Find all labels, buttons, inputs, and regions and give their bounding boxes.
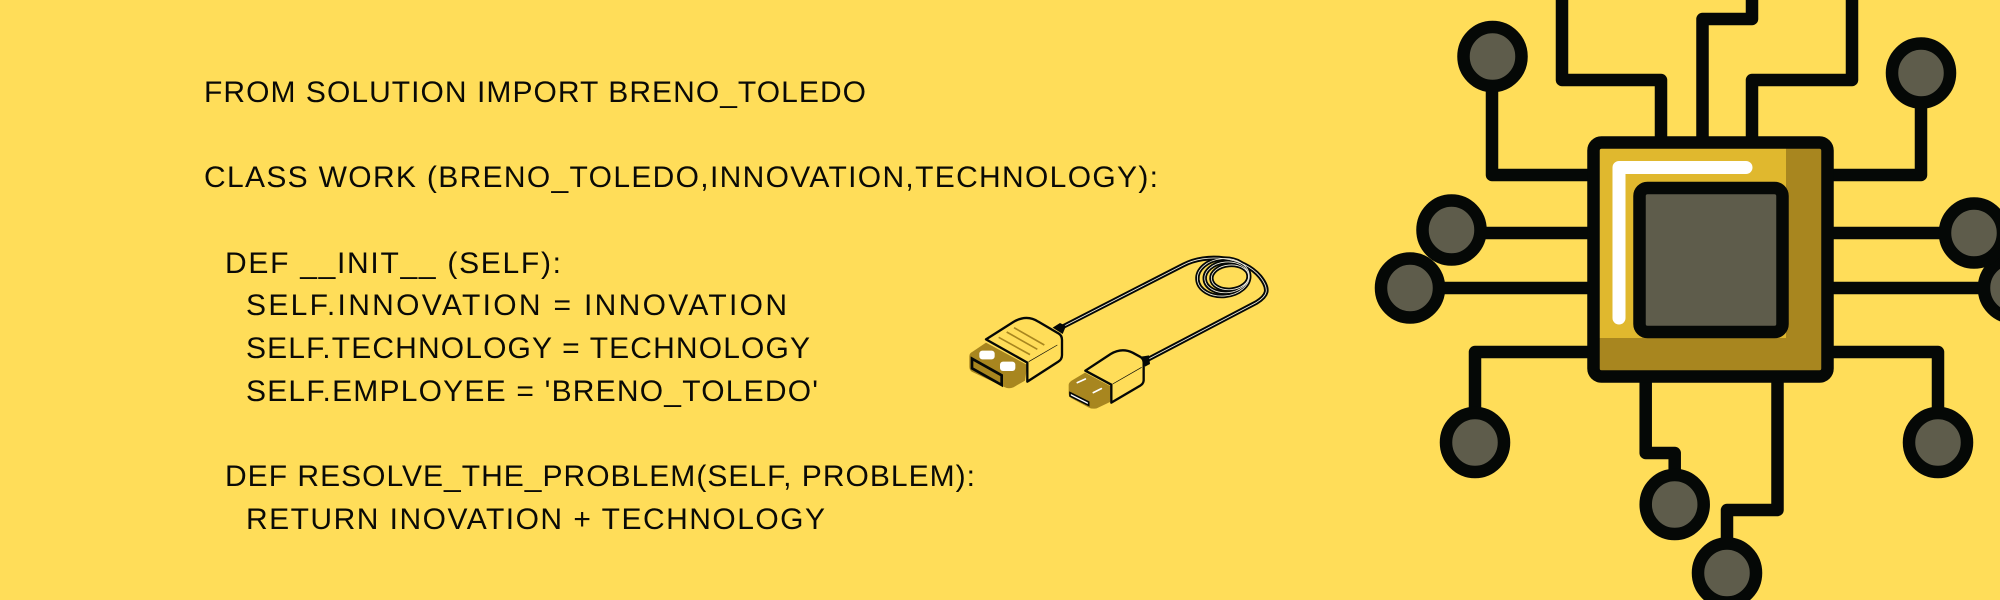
connector nodes xyxy=(1381,27,2000,600)
cable xyxy=(1062,256,1266,360)
code line: init: DEF __INIT__ (SELF): xyxy=(225,247,561,280)
icon: usb cable xyxy=(969,256,1266,409)
large plug xyxy=(969,318,1062,388)
code text block xyxy=(204,76,1158,536)
code line: import: FROM SOLUTION IMPORT BRENO_TOLEDO xyxy=(204,76,866,109)
code line: innovation: SELF.INNOVATION = INNOVATION xyxy=(246,289,787,322)
chip highlight xyxy=(1619,168,1746,318)
code line: employee: SELF.EMPLOYEE = 'BRENO_TOLEDO' xyxy=(246,375,818,408)
icon: circuit chip xyxy=(1381,0,2000,600)
code line: technology: SELF.TECHNOLOGY = TECHNOLOGY xyxy=(246,332,810,365)
code line: resolve: DEF RESOLVE_THE_PROBLEM(SELF, PROBLEM): xyxy=(225,460,975,493)
small plug xyxy=(1069,350,1144,409)
circuit traces xyxy=(1410,0,2000,573)
code line: return: RETURN INOVATION + TECHNOLOGY xyxy=(246,503,825,536)
chip core xyxy=(1640,188,1782,332)
code line: class: CLASS WORK (BRENO_TOLEDO,INNOVATION,TECHNOLOGY): xyxy=(204,161,1158,194)
chip body xyxy=(1594,142,1828,376)
